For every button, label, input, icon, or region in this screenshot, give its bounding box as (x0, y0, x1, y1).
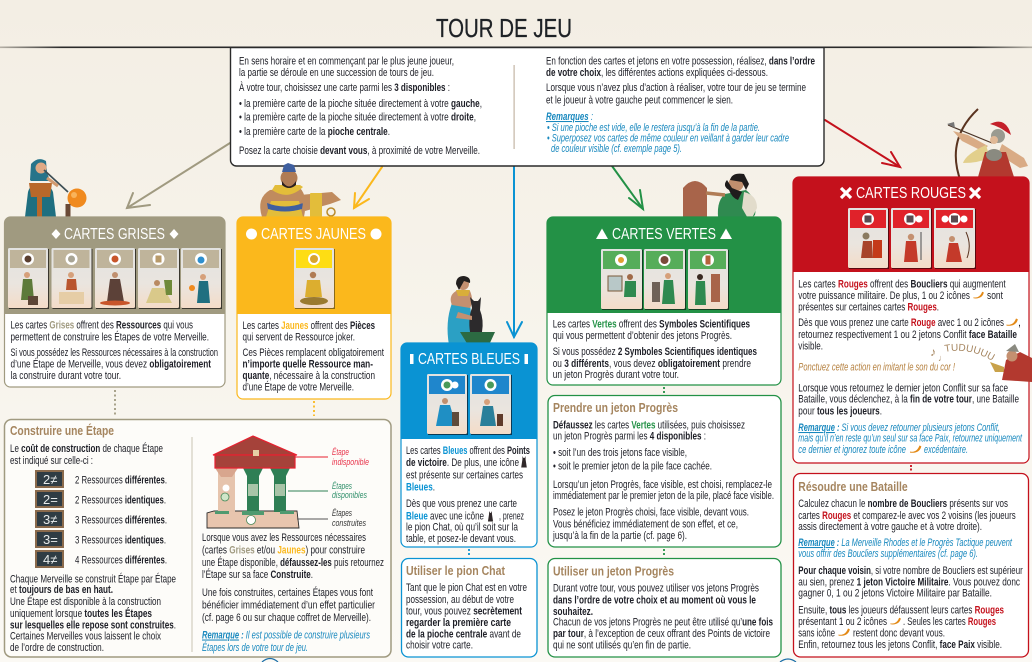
text: utiliser jeton: dans l’ordre de votre choix et au moment où vous le (553, 594, 756, 606)
heading: prendre: Prendre un jeton Progrès (553, 401, 678, 415)
text: cartes bleues: de victoire. De plus, une icône (406, 457, 519, 469)
character: archer (947, 109, 1028, 182)
intro right column: et le joueur à votre gauche peut commencer le sien. (546, 94, 733, 106)
connector: green dotted lower (663, 549, 665, 557)
cost table: 2 Ressources identiques. (75, 494, 166, 506)
panel: utiliser un jeton progrès (548, 558, 781, 657)
text: prendre: immédiatement par le premier jeton de la pile, placé face visible. (553, 490, 774, 502)
text: cartes jaunes: quante, nécessaire à la construction (242, 370, 375, 382)
text: prendre: jusqu’à la fin de la partie (cf. page 6). (552, 530, 687, 542)
text: bataille: sans icône (798, 628, 835, 640)
icons: horn inline (838, 618, 901, 636)
text: cartes rouges: présentes sur certaines cartes Rouges. (798, 302, 939, 314)
page markers (262, 658, 796, 662)
text: cartes rouges: sont (987, 290, 1003, 302)
intro right column: Remarques : (546, 111, 593, 123)
intro left column (239, 56, 482, 157)
text: cartes jaunes: Les cartes Jaunes offrent des Pièces (242, 320, 375, 332)
text: règles de construction: et toujours de bas en haut. (10, 584, 113, 596)
title: TOUR DE JEU (436, 13, 572, 43)
text: prendre: Défaussez les cartes Vertes utilisées, puis choisissez (553, 420, 745, 432)
text: cartes rouges: ce dernier et ignorez toute icône (798, 444, 906, 456)
text: coût: Le coût de construction de chaque Étape (10, 442, 163, 455)
cards: blue (427, 374, 512, 435)
panel: résoudre une bataille (794, 474, 1028, 657)
panel: cartes vertes (547, 217, 781, 385)
text: cartes vertes: Si vous possédez 2 Symboles Scientifiques identiques (553, 346, 757, 358)
cost table: 3≠ (43, 512, 57, 527)
text: ressources nécessaires: Remarque : Il est possible de construire plusieurs (202, 630, 370, 642)
cost table (35, 470, 167, 568)
cost table: 2= (43, 492, 58, 507)
callout: tuduuuut: ♪ (930, 345, 936, 359)
connector: green dotted (663, 387, 665, 395)
text: pion chat: tour, vous pouvez secrètement (406, 606, 522, 618)
heading: cartes rouges: CARTES ROUGES (856, 185, 966, 202)
text: cartes rouges: votre puissance militaire. De plus, 1 ou 2 icônes (798, 290, 970, 302)
icons: horn row (910, 292, 1018, 453)
panel: construire une étape (4, 420, 391, 657)
text: cartes jaunes: qui servent de Ressource joker. (242, 332, 355, 344)
arrow: to grey cards (127, 143, 230, 208)
text: coût (10, 442, 163, 467)
text: bataille: restent donc devant vous. (853, 628, 945, 640)
diagram labels: Étapes (332, 481, 352, 491)
text: bataille (798, 498, 1023, 651)
text: cartes grises (10, 320, 218, 382)
text: règles de construction (10, 572, 176, 654)
connector: blue dotted (468, 549, 470, 557)
text: cartes jaunes (242, 320, 384, 394)
text: cartes rouges: excédentaire. (924, 444, 968, 456)
text: pion chat: possession, au début de votre (406, 594, 514, 606)
text: cartes vertes: qui vous permettent d’obtenir des jetons Progrès. (553, 330, 732, 342)
arrow: to red cards (825, 120, 900, 167)
text: cartes bleues (406, 445, 530, 545)
text: cartes vertes: ou 3 différents, vous devez obligatoirement prendre (553, 358, 751, 370)
text: cartes rouges: pour tous les joueurs. (798, 406, 882, 418)
text: cartes bleues: Bleue avec une icône (406, 510, 484, 522)
panel: utiliser le pion chat (402, 558, 537, 657)
diagram labels: Étapes (332, 508, 352, 518)
text: cartes jaunes: n’importe quelle Ressource man- (242, 358, 373, 370)
text: cartes bleues: Les cartes Bleues offrent des Points (406, 445, 530, 457)
diagram labels (288, 447, 369, 528)
icon: cat inline (488, 511, 493, 522)
text: cartes rouges: Ponctuez cette action en imitant le son du cor ! (798, 362, 955, 374)
text: pion chat: regarder la première carte (406, 617, 511, 629)
panel: prendre un jeton progrès (548, 396, 781, 547)
text: règles de construction: uniquement lorsque toutes les Étapes (10, 607, 152, 620)
intro right column: • Si une pioche est vide, elle le restera jusqu’à la fin de la partie. (547, 122, 760, 134)
text: ressources nécessaires: bénéficier immédiatement d’un effet particulier (202, 600, 375, 612)
cost table: 3= (43, 532, 58, 547)
heading: cartes grises: CARTES GRISES (64, 226, 165, 243)
intro left column: Posez la carte choisie devant vous, à proximité de votre Merveille. (239, 145, 480, 157)
text: ressources nécessaires: Étapes lors de votre tour de jeu. (202, 641, 308, 654)
callout: tuduuuut: ♩ (938, 353, 947, 363)
text: pion chat: Tant que le pion Chat est en votre (406, 582, 527, 594)
text: règles de construction: Certaines Merveilles vous laissent le choix (10, 630, 162, 642)
text: cartes bleues: table, et posez-le devant vous. (406, 533, 516, 545)
text: cartes rouges: retournez respectivement 1 ou 2 jetons Conflit face Bataille (798, 329, 1017, 341)
icon: cat (521, 456, 527, 468)
text: pion chat: choisir votre carte. (406, 640, 473, 652)
text: règles de construction: Chaque Merveille se construit Étape par Étape (10, 572, 176, 586)
text: cartes grises: d’une Étape de Merveille, vous devez obligatoirement (10, 358, 211, 370)
text: utiliser jeton (553, 582, 773, 652)
cost table: 4 Ressources différentes. (75, 554, 167, 566)
intro left column: • la première carte de la pioche située directement à votre droite, (239, 112, 476, 124)
text: prendre: • soit l’un des trois jetons face visible, (553, 447, 687, 459)
heading: bataille: Résoudre une Bataille (798, 480, 908, 494)
text: pion chat (406, 582, 527, 652)
arrow: to blue cards (507, 166, 522, 337)
text: cartes grises: permettent de construire les Étapes de votre Merveille. (10, 330, 209, 344)
intro left column: • la première carte de la pioche située directement à votre gauche, (239, 98, 482, 110)
text: ressources nécessaires: Une fois construites, certaines Étapes vous font (202, 586, 373, 599)
text: cartes rouges: Les cartes Rouges offrent des Boucliers qui augmentent (798, 278, 1006, 290)
text: utiliser jeton: Chacun de vos jetons Progrès ne peut être utilisé qu’une fois (553, 616, 773, 628)
cards: red (848, 208, 976, 269)
text: règles de construction: sur lesquelles elle repose sont construites. (10, 620, 176, 632)
arrow: to yellow cards (354, 167, 382, 208)
text: règles de construction: de l’ordre de construction. (10, 642, 104, 654)
intro left column: la partie se déroule en une succession de tours de jeu. (239, 67, 434, 79)
text: pion chat: de la pioche centrale avant de (406, 628, 521, 640)
text: cartes grises: Si vous possédez les Ressources nécessaires à la construction (10, 347, 218, 359)
text: cartes bleues: Dès que vous prenez une carte (406, 498, 517, 510)
text: cartes grises: Les cartes Grises offrent des Ressources qui vous (10, 320, 193, 332)
text: coût: est indiqué sur celle-ci : (10, 455, 93, 467)
text: ressources nécessaires: (cf. page 6 ou sur chaque coffret de Merveille). (202, 612, 371, 624)
text: bataille: Calculez chacun le nombre de Boucliers présents sur vos (798, 498, 1008, 510)
diagram labels: Étape (332, 447, 349, 457)
text: prendre: Posez le jeton Progrès choisi, face visible, devant vous. (553, 506, 749, 518)
text: cartes rouges (798, 278, 1023, 456)
heading: cartes jaunes: CARTES JAUNES (261, 226, 366, 243)
text: prendre: un jeton Progrès parmi les 4 disponibles : (553, 430, 706, 442)
connector: red dotted (910, 465, 912, 472)
top rule (0, 46, 1032, 48)
diagram labels: disponibles (332, 490, 367, 500)
character: sculptor (683, 174, 757, 224)
text: utiliser jeton: Durant votre tour, vous pouvez utiliser vos jetons Progrès (553, 582, 759, 594)
text: cartes bleues: Bleues. (406, 482, 435, 494)
text: cartes vertes: Les cartes Vertes offrent des Symboles Scientifiques (553, 318, 750, 330)
text: cartes bleues: , prenez (499, 510, 524, 522)
intro right column: Lorsque vous n’avez plus d’action à réaliser, votre tour de jeu se termine (546, 82, 806, 94)
cost table: 3 Ressources différentes. (75, 514, 167, 526)
arrow: to green cards (612, 166, 643, 209)
character: merchant (260, 163, 341, 217)
card: yellow (294, 248, 335, 309)
text: cartes rouges: visible. (798, 340, 823, 352)
text: cartes rouges: Dès que vous prenez une carte Rouge avec 1 ou 2 icônes (798, 317, 1004, 329)
text: cartes bleues: le pion Chat, où qu’il soit sur la (406, 522, 518, 534)
text: cartes rouges: , (1018, 317, 1021, 329)
intro left column: • la première carte de la pioche centrale. (239, 126, 390, 138)
text: ressources nécessaires (202, 532, 384, 654)
diagram labels: indisponible (332, 457, 369, 467)
cost table: 3 Ressources identiques. (75, 534, 166, 546)
text: bataille: Ensuite, tous les joueurs défaussent leurs cartes Rouges (798, 604, 1004, 616)
text: cartes jaunes: d’une Étape de votre Merveille. (242, 380, 354, 394)
character: woman with cat (448, 276, 495, 345)
text: cartes vertes (553, 318, 757, 381)
text: cartes vertes: un jeton Progrès durant votre tour. (553, 369, 679, 381)
panel: introduction (230, 48, 824, 166)
text: ressources nécessaires: l’Étape sur sa face Construite. (202, 568, 313, 581)
text: bataille: Enfin, retournez tous les jetons Conflit, face Paix visible. (798, 639, 1002, 651)
intro right column (546, 56, 815, 155)
text: règles de construction: Une Étape est disponible à la construction (10, 595, 161, 608)
callout: tuduuuut (930, 344, 1032, 382)
text: utiliser jeton: par tour, à l’exception de ceux offrant des Points de victoire (553, 628, 770, 640)
diagram: temple (207, 436, 299, 528)
intro right column: de couleur visible (cf. exemple page 5). (551, 143, 682, 155)
cost table: 2 Ressources différentes. (75, 474, 167, 486)
panel: cartes grises (4, 217, 225, 387)
intro right column: En fonction des cartes et jetons en votre possession, réalisez, dans l’ordre (546, 56, 815, 68)
cost table: 4≠ (43, 552, 57, 567)
intro right column: de votre choix, les différentes actions expliquées ci-dessous. (546, 67, 768, 79)
connector: yellow dotted (313, 401, 315, 416)
intro right column: • Superposez vos cartes de même couleur en veillant à garder leur cadre (547, 132, 789, 144)
heading: construire: Construire une Étape (10, 423, 114, 438)
heading: cartes bleues: CARTES BLEUES (418, 351, 520, 368)
text: bataille: . Seules les cartes Rouges (903, 616, 996, 628)
text: utiliser jeton: souhaitez. (553, 606, 593, 618)
diagram labels: construites (332, 518, 366, 528)
cards: green (601, 249, 729, 310)
text: cartes rouges: Bataille, vous déclenchez, à la fin de votre tour, une Bataille (798, 394, 1019, 406)
text: ressources nécessaires: (cartes Grises et/ou Jaunes) pour construire (202, 544, 365, 556)
text: cartes jaunes: Ces Pièces remplacent obligatoirement (242, 347, 384, 359)
panel: cartes jaunes (237, 217, 391, 399)
text: cartes bleues: est présente sur certaines cartes (406, 470, 523, 482)
text: prendre: Vous bénéficiez immédiatement de son effet, et ce, (553, 518, 738, 530)
heading: pion chat: Utiliser le pion Chat (406, 564, 506, 578)
cost table: 2≠ (43, 472, 57, 487)
text: prendre: • soit le premier jeton de la pile face cachée. (553, 460, 712, 472)
text: ressources nécessaires: Lorsque vous avez les Ressources nécessaires (202, 532, 366, 544)
intro left column: À votre tour, choisissez une carte parmi les 3 disponibles : (239, 81, 450, 94)
text: prendre: Lorsqu’un jeton Progrès, face visible, est choisi, remplacez-le (553, 479, 772, 491)
text: prendre (552, 420, 774, 542)
heading: utiliser jeton: Utiliser un jeton Progrès (553, 564, 674, 578)
text: bataille: assis directement à votre gauche et à votre droite). (798, 521, 982, 533)
character: glass blower (25, 159, 86, 219)
callout: tuduuuut: TUDUUUUT (944, 344, 995, 360)
cards: grey (8, 248, 222, 309)
panel: cartes rouges (792, 176, 1032, 464)
text: bataille: présentant 1 ou 2 icônes (798, 616, 887, 628)
text: ressources nécessaires: une Étape disponible, défaussez-les puis retournez (202, 556, 384, 569)
text: utiliser jeton: qui ne sont utilisés qu’en fin de partie. (553, 640, 691, 652)
connector: grey dotted (114, 390, 116, 416)
heading: cartes vertes: CARTES VERTES (612, 226, 716, 243)
intro left column: En sens horaire et en commençant par le plus jeune joueur, (239, 56, 454, 68)
text: cartes grises: la construire durant votre tour. (10, 370, 121, 382)
panel: cartes bleues (401, 343, 537, 547)
